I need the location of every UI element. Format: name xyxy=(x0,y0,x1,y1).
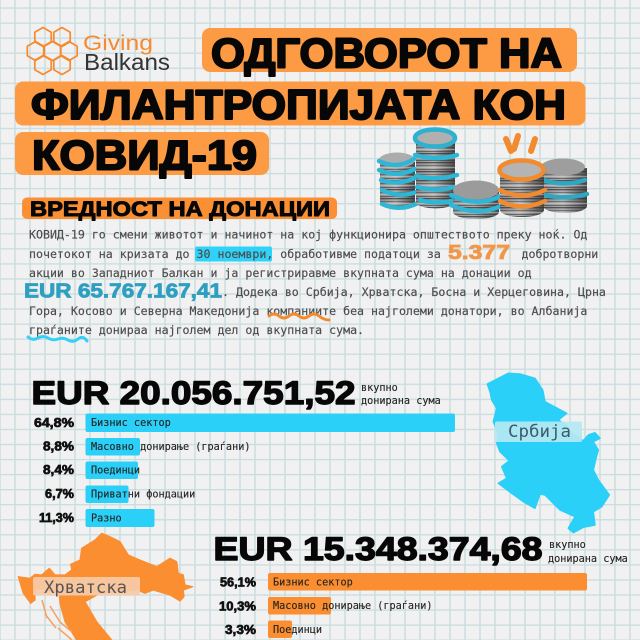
Serbia bar chart: Бизнис сектор xyxy=(91,418,171,429)
logo: Giving Balkans xyxy=(27,28,170,75)
Croatia total: донирана сума xyxy=(548,554,628,565)
body text lines xyxy=(29,228,606,337)
Serbia total xyxy=(32,375,441,411)
body text lines: . Додека во Србија, Хрватска, Босна и Херцеговина, Црна xyxy=(222,285,606,299)
Croatia bar chart: Поединци xyxy=(273,625,322,636)
Serbia bar chart: Разно xyxy=(91,514,122,524)
panel: Croatia xyxy=(18,531,628,640)
map: Serbia xyxy=(487,373,609,533)
intro text block xyxy=(24,228,606,341)
Croatia bar chart: Бизнис сектор xyxy=(273,578,353,588)
Serbia bar chart: 8,8% xyxy=(43,440,74,454)
Serbia total: EUR 20.056.751,52 xyxy=(32,375,356,411)
Serbia bar chart: 6,7% xyxy=(45,487,74,501)
body text lines: КОВИД-19 го смени животот и начинот на кој функционира општеството преку ноќ. Од xyxy=(29,228,587,242)
map: Croatia xyxy=(18,533,193,640)
Serbia bar chart: 11,3% xyxy=(39,511,74,525)
Croatia total: EUR 15.348.374,68 xyxy=(214,531,542,567)
squiggle: blue underline xyxy=(28,336,87,341)
logo wordmark: Balkans xyxy=(84,49,170,75)
coin stack 4 xyxy=(500,160,545,217)
stat: total donations: EUR 65.767.167,41 xyxy=(24,280,222,302)
coin stack 1 xyxy=(379,152,419,209)
body text lines: Гора, Косово и Северна Македонија компаниите беа најголеми донатори, во Албанија xyxy=(29,304,587,318)
Serbia bar chart: Масовно донирање (граѓани) xyxy=(91,441,250,453)
highlight: date xyxy=(195,246,272,262)
Serbia bar chart: Поединци xyxy=(91,466,140,476)
Serbia total: вкупно xyxy=(361,383,398,394)
Croatia bar chart xyxy=(219,573,587,638)
Serbia bar chart: Приватни фондации xyxy=(91,488,195,500)
Serbia bar chart: 64,8% xyxy=(34,416,74,430)
coin stack 5 xyxy=(541,158,587,213)
body text lines: почетокот на кризата до 30 ноември, обработивме податоци за xyxy=(29,247,441,261)
body text lines: добротворни xyxy=(522,247,598,261)
Serbia bar chart xyxy=(34,414,455,527)
Serbia bar chart: 8,4% xyxy=(43,463,74,477)
map: Serbia: Србија xyxy=(508,422,571,442)
sparkle marks xyxy=(506,136,535,151)
Croatia total xyxy=(214,531,628,567)
map: Croatia: Хрватска xyxy=(44,578,127,598)
coin stack 3 xyxy=(451,180,501,219)
title line 3: КОВИД-19 xyxy=(32,132,257,178)
title line 1: ОДГОВОРОТ НА xyxy=(211,30,562,76)
icon: hexagon knot xyxy=(27,28,77,74)
body text lines: акции во Западниот Балкан и ја регистриравме вкупната сума на донации од xyxy=(29,266,532,280)
illustration: coin stacks xyxy=(379,130,587,219)
coin stack 2 xyxy=(415,130,457,208)
stat: initiatives count: 5.377 xyxy=(448,242,510,264)
Croatia bar chart: 10,3% xyxy=(219,600,256,614)
Serbia total: донирана сума xyxy=(361,396,441,407)
logo wordmark xyxy=(83,31,170,75)
body text lines: граѓаните донираа најголем дел од вкупната сума. xyxy=(29,323,364,337)
Croatia bar chart: 56,1% xyxy=(220,576,256,590)
logo wordmark: Giving xyxy=(83,31,153,55)
section heading: ВРЕДНОСТ НА ДОНАЦИИ xyxy=(30,198,330,221)
Croatia bar chart: Масовно донирање (граѓани) xyxy=(273,600,432,612)
Croatia total: вкупно xyxy=(549,540,586,551)
Croatia bar chart: 3,3% xyxy=(225,623,256,637)
squiggle: orange underline xyxy=(269,314,329,320)
title line 2: ФИЛАНТРОПИЈАТА КОН xyxy=(31,81,566,128)
title xyxy=(15,28,586,178)
panel: Serbia xyxy=(32,373,609,533)
